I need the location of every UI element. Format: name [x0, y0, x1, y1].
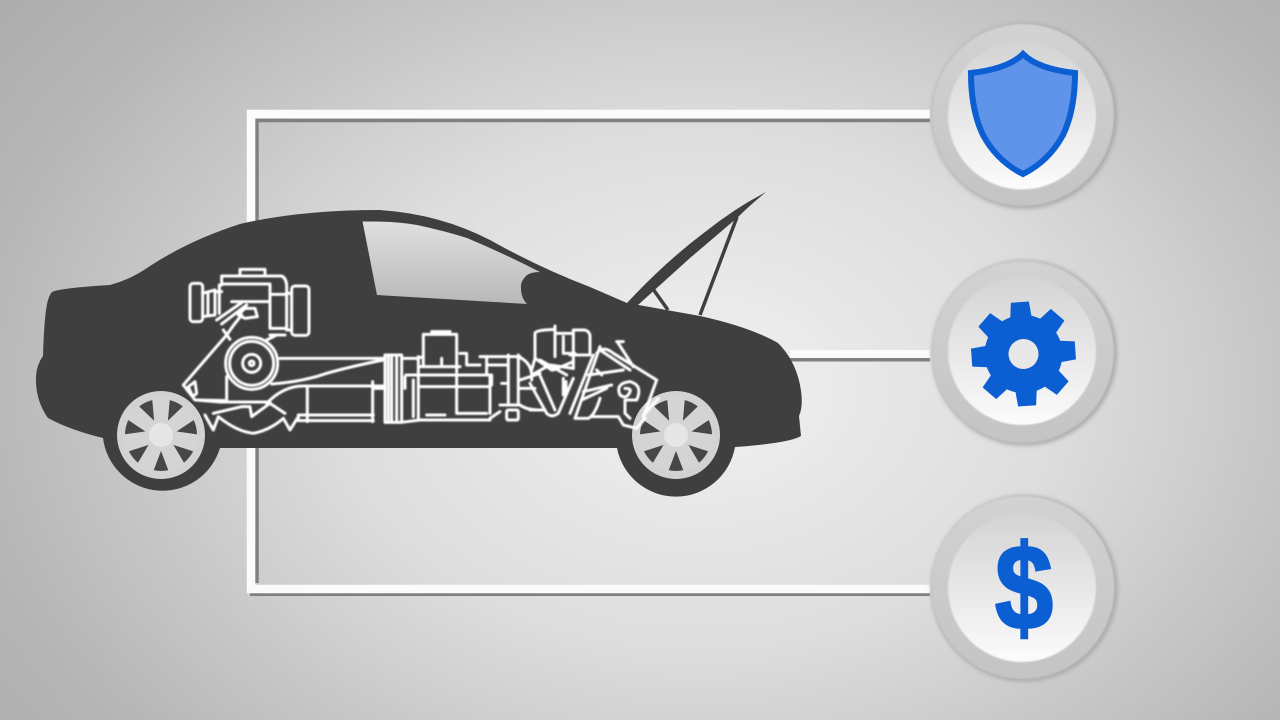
badge face — [948, 42, 1096, 190]
badge shadow — [932, 260, 1117, 446]
car window — [362, 221, 540, 304]
open hood — [626, 192, 766, 305]
badge ring — [932, 24, 1114, 206]
hood struts — [653, 217, 737, 315]
badge ring — [932, 261, 1114, 443]
front engine cluster — [530, 326, 658, 428]
front wheel — [632, 391, 720, 479]
icon: shield — [971, 54, 1075, 174]
badge face — [948, 514, 1096, 662]
car silhouette — [36, 210, 802, 497]
icon: dollar sign: $ — [995, 520, 1053, 655]
engine and drivetrain line art — [183, 269, 658, 433]
rear engine assembly — [183, 269, 385, 433]
badge ring — [932, 496, 1114, 679]
badge face — [948, 277, 1096, 425]
icon: gear — [968, 298, 1079, 410]
badge: safety shield — [932, 24, 1117, 208]
car illustration — [36, 192, 802, 497]
badge shadow — [932, 496, 1118, 682]
rear wheel — [117, 391, 205, 479]
badge: mechanical gear — [932, 260, 1117, 446]
transmission — [385, 332, 540, 422]
connector frame — [250, 114, 930, 594]
badge: cost dollar — [932, 496, 1118, 682]
badge shadow — [932, 24, 1117, 208]
